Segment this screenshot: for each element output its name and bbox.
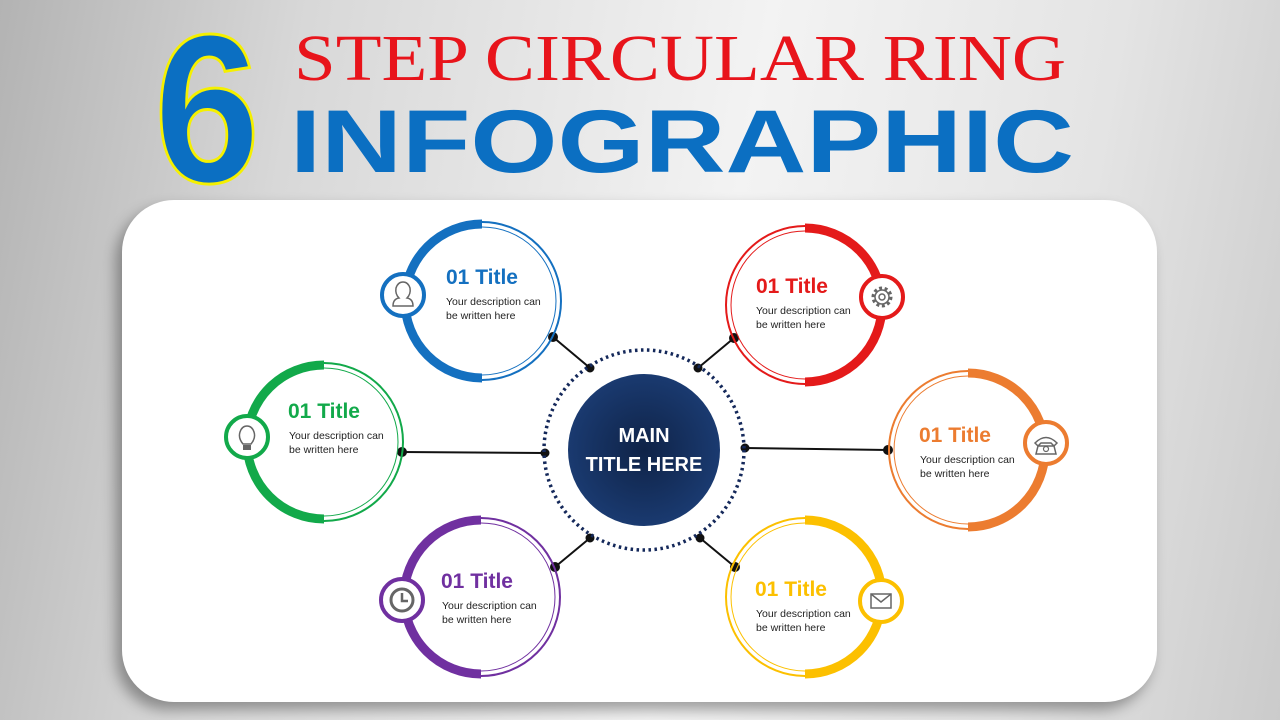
step: yellow: be written here — [756, 622, 826, 634]
center: dotted ring and main title — [544, 350, 744, 550]
step: red: 01 Title — [756, 275, 828, 298]
icon: person — [382, 274, 424, 316]
step: green: Your description can — [289, 430, 384, 442]
step: purple: Your description can — [442, 600, 537, 612]
step: blue: 01 Title — [446, 266, 518, 289]
step: red — [726, 226, 903, 384]
step: green: be written here — [289, 444, 359, 456]
step: purple: be written here — [442, 614, 512, 626]
icon: phone — [1025, 422, 1067, 464]
step: green — [226, 363, 403, 521]
title: infographic: INFOGRAPHIC — [290, 91, 1074, 191]
icon: mail — [860, 580, 902, 622]
step: purple — [381, 518, 560, 676]
step: red: Your description can — [756, 305, 851, 317]
connectors — [398, 333, 892, 571]
icon: bulb — [226, 416, 268, 458]
step: orange — [889, 371, 1067, 529]
panel: white card — [122, 200, 1157, 702]
step: green: 01 Title — [288, 400, 360, 423]
center: dotted ring and main title: MAIN — [618, 425, 670, 447]
title: step circular ring: STEP CIRCULAR RING — [294, 22, 1066, 95]
step: blue: Your description can — [446, 296, 541, 308]
title block — [154, 0, 1074, 200]
icon: clock — [381, 579, 423, 621]
step: blue — [382, 222, 561, 380]
step: yellow — [726, 518, 902, 676]
step: yellow: 01 Title — [755, 578, 827, 601]
step: orange: 01 Title — [919, 424, 991, 447]
step: yellow: Your description can — [756, 608, 851, 620]
step: red: be written here — [756, 319, 826, 331]
step: orange: be written here — [920, 468, 990, 480]
step: blue: be written here — [446, 310, 516, 322]
center: dotted ring and main title: TITLE HERE — [586, 454, 702, 476]
step: purple: 01 Title — [441, 570, 513, 593]
icon: gear — [861, 276, 903, 318]
step: orange: Your description can — [920, 454, 1015, 466]
